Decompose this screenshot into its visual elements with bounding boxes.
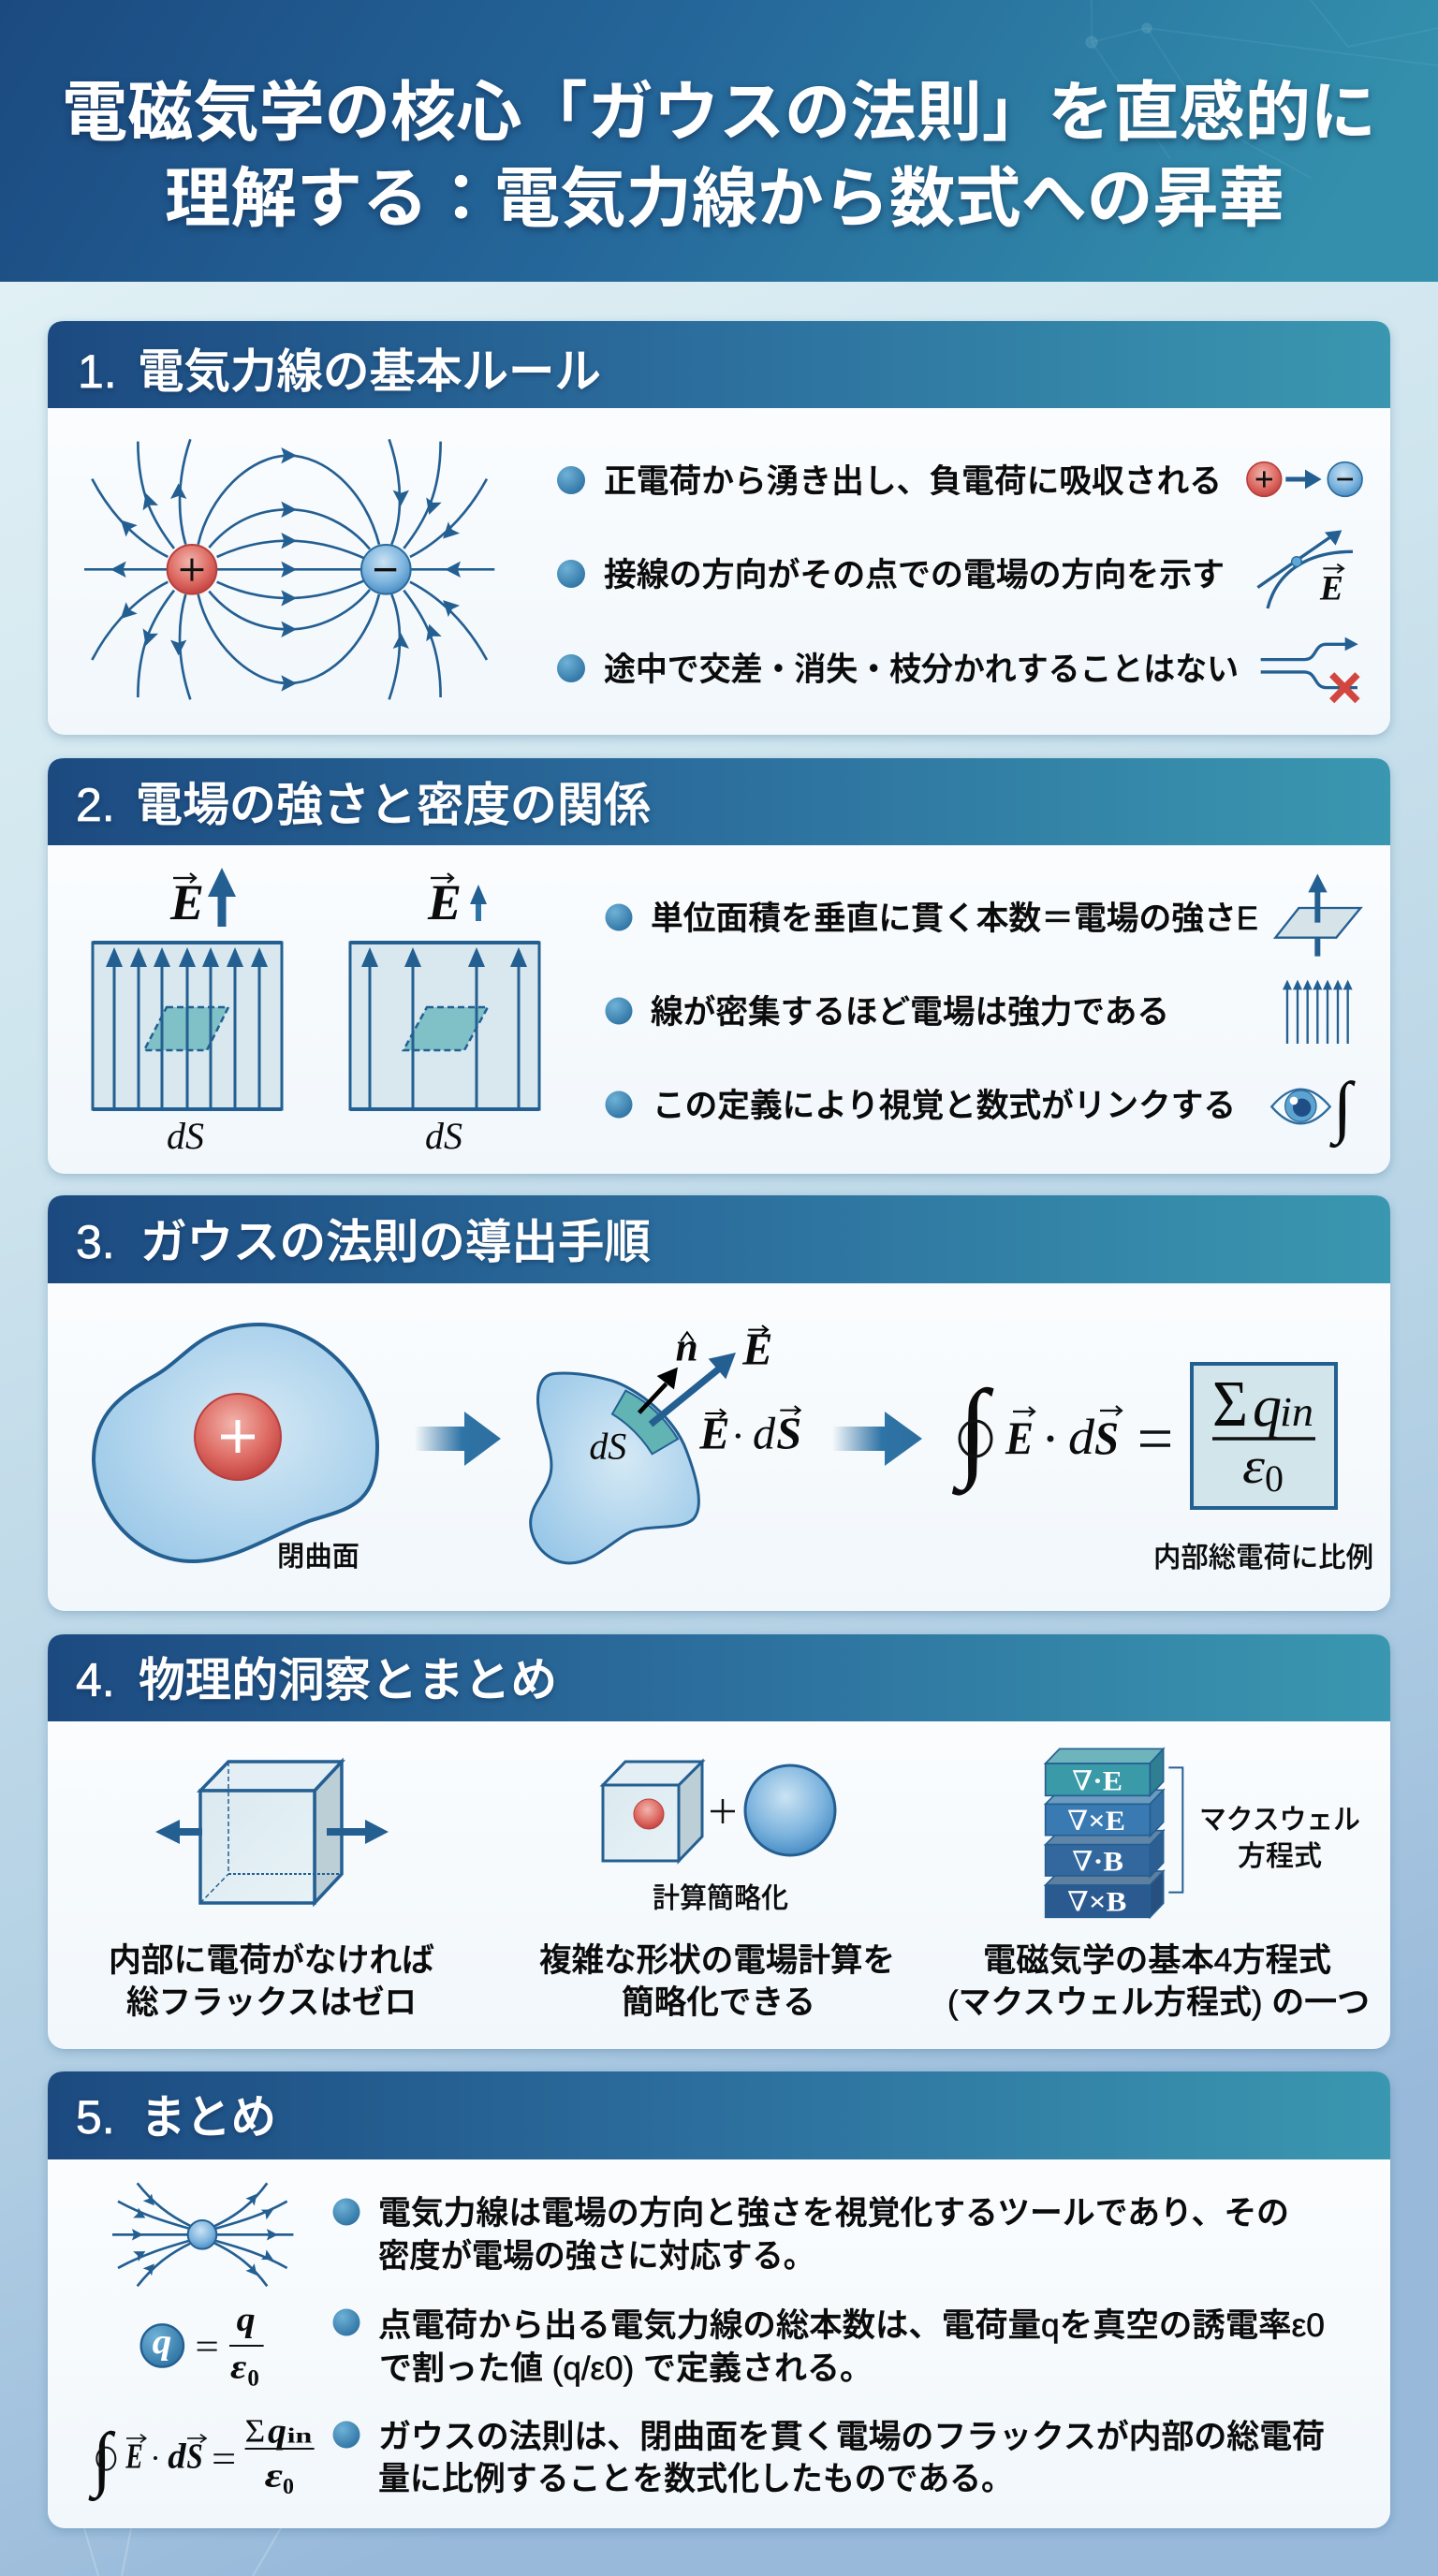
label: Maxwell equations	[1199, 1805, 1360, 1872]
diagram: surface patch with vectors: n	[676, 1325, 698, 1369]
icon: cube with flux arrows	[155, 1762, 389, 1903]
diagram: sparse field: dS	[425, 1115, 462, 1157]
label: proportional to enclosed charge: 内部総電荷に比例	[1153, 1543, 1373, 1573]
diagram: surface patch with vectors: dS	[589, 1425, 626, 1467]
formula box	[1192, 1364, 1336, 1508]
icon: positive charge	[168, 545, 216, 594]
icon: integral: ∫	[1329, 1069, 1356, 1149]
text 5-1	[378, 2195, 1289, 2275]
heading 2: 電場の強さと密度の関係	[136, 779, 651, 831]
icons: rules	[1247, 462, 1362, 701]
icon: Maxwell stack: ∇×B	[1067, 1888, 1126, 1918]
icon: tangent	[1257, 530, 1353, 608]
heading 3: 3.	[76, 1216, 115, 1268]
diagram: sparse field: E	[427, 874, 462, 930]
arrow 1	[415, 1412, 501, 1466]
caption: Maxwell: 電磁気学の基本4方程式	[983, 1942, 1331, 1979]
formula: Gauss law: E	[1005, 1412, 1034, 1464]
diagram: dense field	[93, 868, 282, 1157]
caption: simplify	[539, 1942, 895, 2021]
diagram: surface patch with vectors	[531, 1325, 801, 1563]
caption: simplify: 簡略化できる	[622, 1984, 815, 2021]
icon: no branching	[1261, 637, 1358, 701]
heading 5: 5.	[76, 2091, 115, 2144]
icon: plus to minus	[1247, 462, 1362, 496]
icon: point charge field lines	[112, 2183, 293, 2286]
surface dS	[404, 1007, 488, 1050]
bullet 5-3	[333, 2421, 360, 2449]
formula box: in	[1280, 1389, 1313, 1435]
formula box: 0	[1265, 1457, 1284, 1500]
bullet 2-1	[605, 904, 633, 930]
label: closed surface: 閉曲面	[277, 1542, 360, 1573]
bullet 5-2	[333, 2308, 360, 2336]
text 5-2: で割った値 (q/ε0) で定義される。	[379, 2350, 873, 2387]
bullet 1-1	[557, 466, 585, 494]
formula: Gauss law small: ε	[265, 2457, 284, 2496]
formula: Gauss law: S	[1094, 1412, 1119, 1464]
diagram: surface patch with vectors: d	[753, 1410, 776, 1459]
title	[62, 76, 1376, 235]
diagram: closed surface	[94, 1325, 377, 1561]
icon: Maxwell stack: ∇×E	[1067, 1807, 1125, 1837]
icon: Maxwell stack	[1046, 1749, 1182, 1918]
text 2-3: この定義により視覚と数式がリンクする	[653, 1088, 1236, 1124]
heading 4: 物理的洞察とまとめ	[139, 1654, 557, 1706]
formula box: Σ	[1212, 1368, 1248, 1441]
formula: Gauss law small: 0	[283, 2475, 294, 2499]
heading 3: ガウスの法則の導出手順	[140, 1216, 651, 1268]
icon: plane with arrow	[1275, 873, 1360, 957]
icons: density	[1271, 873, 1360, 1149]
panel: 2 field strength and density	[48, 758, 1390, 1174]
icon: Maxwell stack: ∇·E	[1072, 1766, 1123, 1796]
label: Maxwell equations: マクスウェル	[1199, 1805, 1360, 1836]
diagram: surface patch with vectors: E	[698, 1410, 730, 1459]
label: Maxwell equations: 方程式	[1238, 1841, 1322, 1872]
heading 5: まとめ	[140, 2091, 276, 2144]
diagram: dipole field lines	[84, 439, 494, 699]
heading 4: 4.	[76, 1654, 115, 1706]
formula: Gauss law small: d	[168, 2437, 187, 2477]
caption: zero flux: 総フラックスはゼロ	[126, 1984, 417, 2021]
icon: dense arrows	[1283, 980, 1353, 1044]
icon: cube plus sphere	[603, 1762, 835, 1861]
formula: Gauss law small: E	[125, 2437, 143, 2477]
formula: Gauss law: d	[1068, 1409, 1095, 1465]
caption: Maxwell	[947, 1942, 1370, 2021]
formula: Gauss law small: S	[186, 2437, 203, 2477]
bullet 2-3	[605, 1091, 633, 1118]
formula: Gauss law: ∫	[951, 1368, 994, 1496]
icon: tangent: E	[1319, 570, 1343, 608]
caption: Maxwell: (マクスウェル方程式) の一つ	[947, 1984, 1370, 2021]
heading 2: 2.	[76, 779, 115, 831]
text 5-1: 密度が電場の強さに対応する。	[378, 2238, 814, 2275]
formula: q over epsilon	[141, 2301, 264, 2391]
formula: q over epsilon: q	[237, 2301, 256, 2339]
formula: q over epsilon: ε	[230, 2349, 247, 2387]
formula box: q	[1253, 1375, 1282, 1439]
formula: q over epsilon: q	[153, 2322, 171, 2362]
text 5-1: 電気力線は電場の方向と強さを視覚化するツールであり、その	[378, 2195, 1289, 2232]
icon: eye	[1271, 1090, 1330, 1123]
caption: simplify: 複雑な形状の電場計算を	[539, 1942, 895, 1979]
surface dS	[144, 1007, 228, 1050]
bullet 1-2	[557, 560, 585, 588]
text 1-2: 接線の方向がその点での電場の方向を示す	[604, 557, 1225, 593]
text 1-3: 途中で交差・消失・枝分かれすることはない	[604, 651, 1239, 688]
text 5-2	[378, 2307, 1325, 2387]
formula: Gauss law small: Σ	[245, 2412, 265, 2449]
text 5-2: 点電荷から出る電気力線の総本数は、電荷量qを真空の誘電率ε0	[378, 2307, 1325, 2344]
title banner	[0, 0, 1438, 282]
title: 電磁気学の核心「ガウスの法則」を直感的に	[62, 76, 1376, 149]
text 5-3: 量に比例することを数式化したものである。	[378, 2461, 1013, 2497]
diagram: sparse field	[350, 873, 539, 1157]
caption: zero flux	[109, 1942, 434, 2021]
heading 5	[76, 2091, 276, 2144]
title: 理解する：電気力線から数式への昇華	[165, 162, 1284, 235]
diagram: surface patch with vectors: E	[741, 1325, 773, 1374]
diagram: surface patch with vectors: S	[776, 1410, 801, 1459]
bullet 2-2	[605, 998, 633, 1024]
formula: Gauss law small: in	[287, 2423, 312, 2448]
label: simplified calculation: 計算簡略化	[653, 1883, 788, 1914]
panel: 5 summary	[48, 2071, 1390, 2528]
text 5-3: ガウスの法則は、閉曲面を貫く電場のフラックスが内部の総電荷	[378, 2419, 1325, 2455]
formula: Gauss law small: q	[268, 2411, 286, 2451]
diagram: dense field: E	[169, 874, 204, 930]
text 2-2: 線が密集するほど電場は強力である	[651, 994, 1169, 1031]
formula: Gauss law	[951, 1364, 1336, 1508]
bullet 5-1	[333, 2198, 360, 2226]
panel: 1 basic rules	[48, 321, 1390, 735]
arrow 2	[832, 1412, 922, 1466]
panel: 3 derivation	[48, 1195, 1390, 1611]
formula box: ε	[1242, 1438, 1266, 1494]
text 2-1: 単位面積を垂直に貫く本数＝電場の強さE	[651, 900, 1258, 937]
heading 1: 電気力線の基本ルール	[138, 345, 601, 398]
icon: negative charge	[361, 545, 411, 594]
text 1-1: 正電荷から湧き出し、負電荷に吸収される	[604, 463, 1222, 500]
icon: Maxwell stack: ∇·B	[1072, 1847, 1123, 1877]
bullet 1-3	[557, 654, 585, 682]
formula: q over epsilon: 0	[247, 2365, 259, 2391]
caption: zero flux: 内部に電荷がなければ	[109, 1942, 434, 1979]
heading 1: 1.	[78, 345, 117, 398]
text 5-3	[378, 2419, 1325, 2497]
panel: 4 physical insights	[48, 1634, 1390, 2049]
formula: Gauss law small: ∫	[87, 2419, 115, 2502]
formula: Gauss law small	[87, 2411, 315, 2502]
diagram: dense field: dS	[167, 1115, 204, 1157]
